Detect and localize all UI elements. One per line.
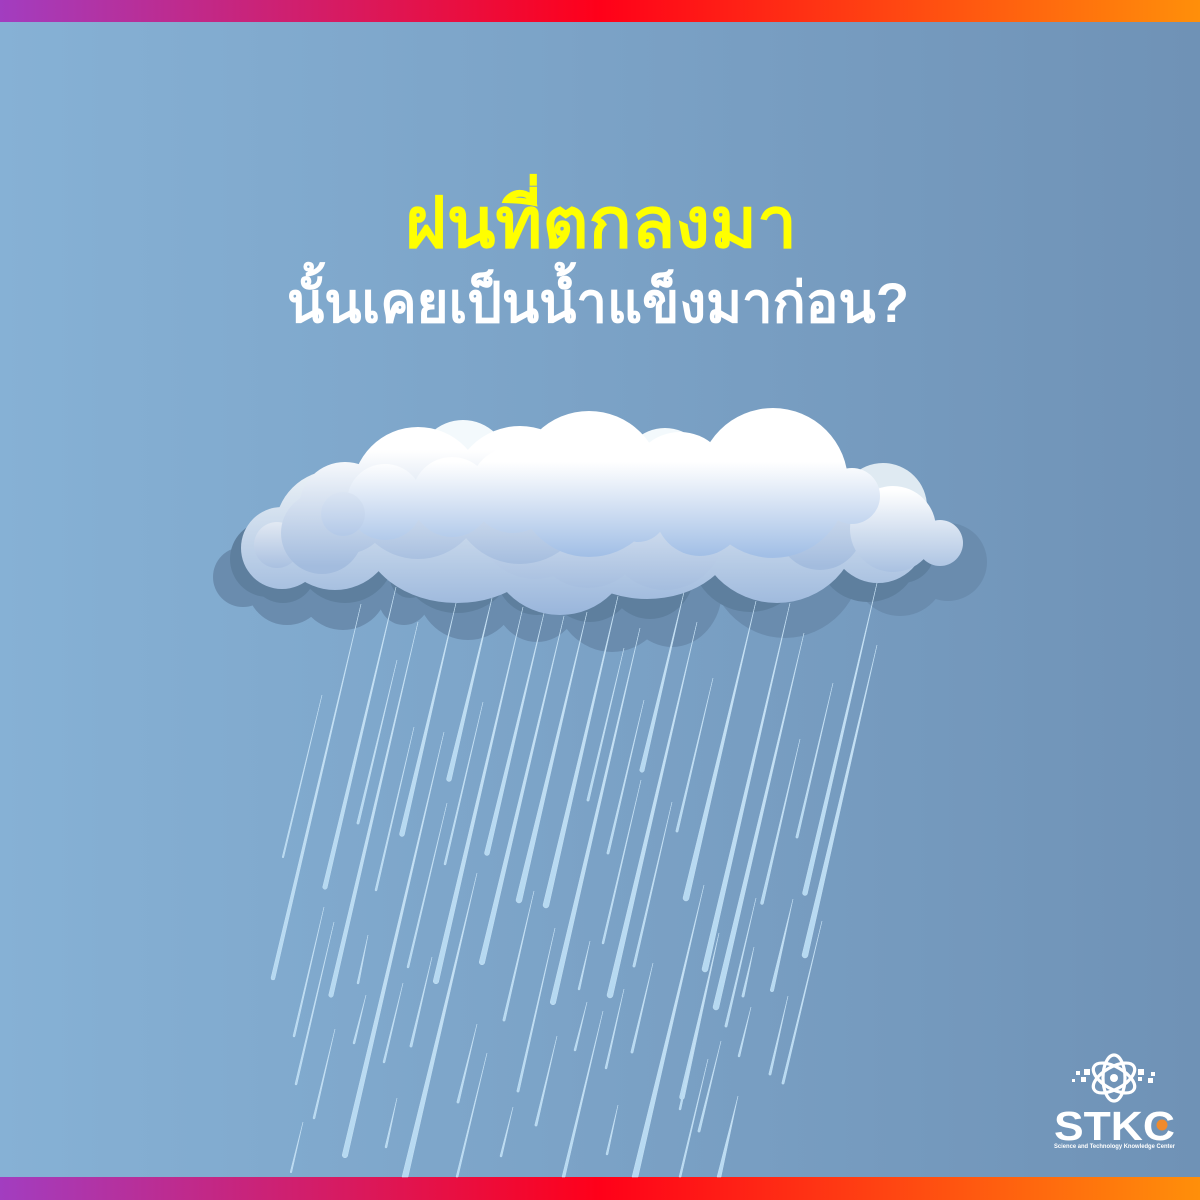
title bbox=[287, 173, 909, 334]
front puffs bbox=[347, 408, 880, 558]
title line 2: นั้นเคยเป็นน้ำแข็งมาก่อน? bbox=[287, 262, 909, 334]
cloud base silhouette bbox=[241, 437, 926, 615]
small puff on left shoulder bbox=[321, 492, 365, 536]
top gradient bar bbox=[0, 0, 1200, 22]
logo: STKC bbox=[1054, 1055, 1176, 1150]
wordmark: STKC bbox=[1054, 1103, 1175, 1149]
back pale puffs bbox=[417, 420, 927, 551]
cloud bbox=[241, 408, 963, 615]
tagline: Science and Technology Knowledge Center bbox=[1054, 1144, 1176, 1150]
lower middle puffs bbox=[476, 461, 725, 590]
cloud shadow bbox=[213, 472, 987, 652]
right puffs bbox=[850, 486, 963, 572]
dark shadow bbox=[230, 488, 935, 622]
icon: pixels bbox=[1072, 1069, 1155, 1083]
icon: atom bbox=[1089, 1055, 1139, 1101]
small side puff left bbox=[254, 522, 300, 568]
upper middle puffs bbox=[281, 426, 863, 574]
left shoulder puff bbox=[299, 462, 391, 554]
bottom gradient bar bbox=[0, 1177, 1200, 1200]
title line 1: ฝนที่ตกลงมา bbox=[405, 173, 797, 262]
orange dot bbox=[1156, 1120, 1168, 1130]
light shadow bbox=[213, 472, 987, 652]
rain streaks bbox=[271, 583, 877, 1177]
